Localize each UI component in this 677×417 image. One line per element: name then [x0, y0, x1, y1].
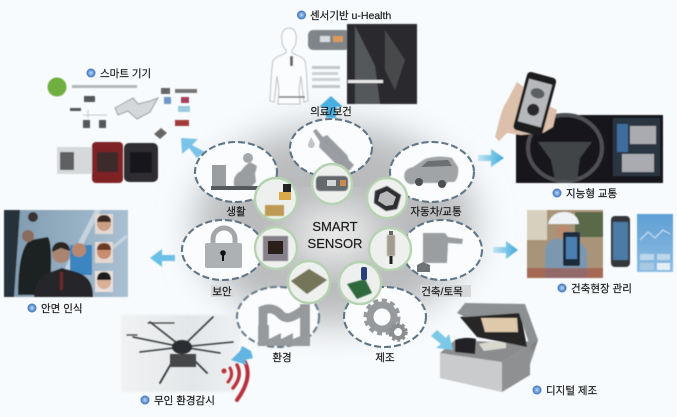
caption: unmanned environmental monitoring: 무인 환경감시	[154, 394, 215, 407]
arrow: to u-Health	[319, 96, 343, 118]
title: smart sensor: SENSOR	[308, 236, 362, 251]
label: security: 보안	[212, 286, 232, 298]
image: smartphone and car dashboard	[495, 71, 663, 183]
sector: environment	[237, 287, 319, 347]
sector: security	[182, 220, 264, 280]
label: environment: 환경	[272, 351, 292, 364]
arrow: to construction site	[493, 241, 518, 259]
caption: sensor u-Health: 센서기반 u-Health	[310, 10, 391, 22]
image: drone with wireless signal	[121, 315, 248, 400]
sensor: automotive chip	[367, 178, 407, 218]
image: construction site management	[527, 210, 673, 278]
sector: daily life	[195, 142, 277, 202]
sector: automobile	[390, 142, 474, 202]
image: 3D printer	[440, 303, 538, 392]
arrow: to drone	[231, 346, 253, 365]
sensor: security chip	[255, 227, 297, 269]
sensor: daily life chip	[255, 178, 297, 220]
label: medical: 의료/보건	[310, 106, 352, 118]
panel: sectors	[182, 106, 482, 364]
arrow: to smart devices	[181, 138, 205, 158]
sensor: medical device	[312, 164, 352, 204]
central grey glow	[195, 125, 475, 325]
arrow: to face recognition	[150, 249, 175, 267]
sensor: environment board	[288, 261, 330, 303]
sensor: construction probe	[369, 228, 411, 270]
caption: face recognition: 안면 인식	[41, 303, 83, 315]
label: manufacturing: 제조	[375, 352, 395, 364]
arrow: to intelligent traffic	[478, 149, 504, 167]
arrow: to digital manufacturing	[431, 330, 453, 350]
caption: intelligent traffic: 지능형 교통	[566, 188, 618, 200]
caption: smart devices: 스마트 기기	[100, 68, 151, 80]
sensor: manufacturing board	[339, 262, 381, 304]
sector: medical	[290, 119, 372, 177]
label: daily life: 생활	[226, 205, 246, 218]
sector: manufacturing	[344, 287, 426, 347]
image: body sensor u-Health	[270, 24, 417, 104]
title: smart sensor: SMART	[312, 219, 358, 234]
caption: construction site management: 건축현장 관리	[571, 283, 632, 295]
image: smart devices	[48, 78, 197, 183]
caption: digital manufacturing: 디지털 제조	[546, 385, 598, 397]
label: automobile: 자동차/교통	[410, 206, 462, 218]
image: face recognition	[4, 210, 128, 297]
sector: construction	[402, 220, 482, 280]
label: construction: 건축/토목	[421, 286, 463, 298]
